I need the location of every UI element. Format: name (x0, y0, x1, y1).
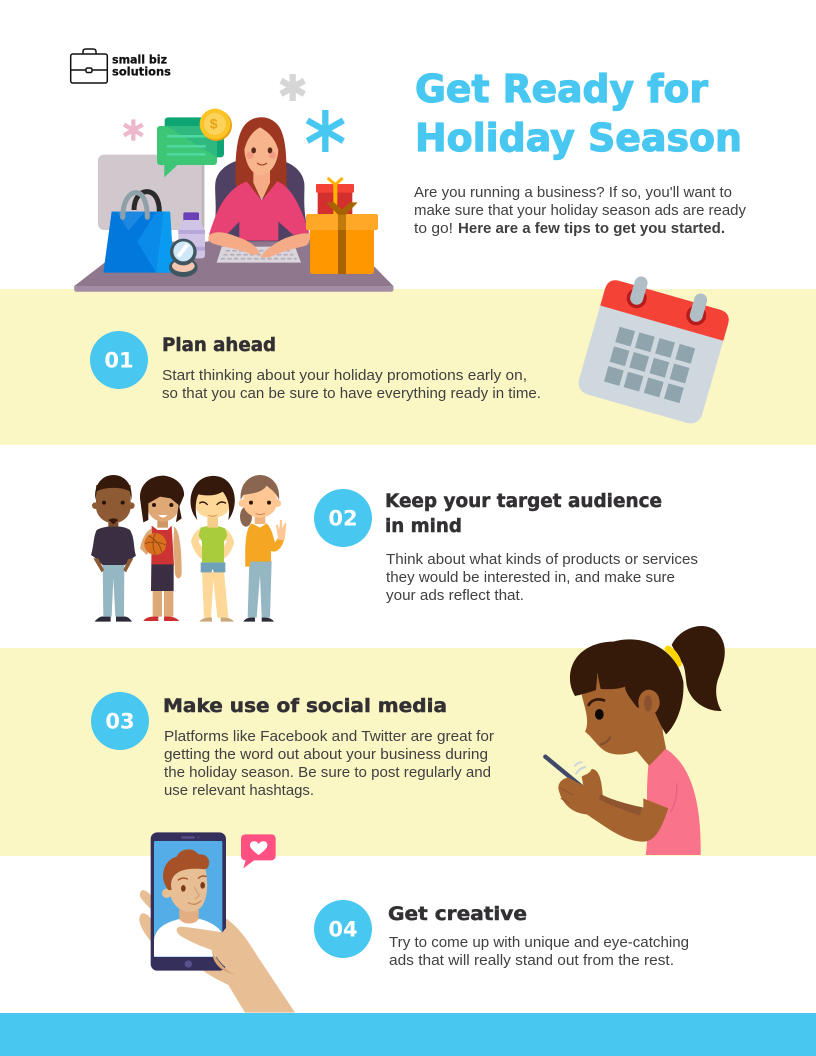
phone (545, 757, 582, 787)
ear (638, 690, 660, 715)
sleeve fold (671, 783, 677, 812)
logo wordmark: small biz (112, 52, 167, 66)
orange gift (306, 202, 378, 274)
man in selfie (154, 849, 222, 957)
body 02: your ads reflect that. (386, 588, 524, 604)
perfume bottle (178, 212, 205, 258)
icon: gold coin (200, 109, 232, 141)
icon: gold coin: $ (210, 116, 218, 132)
monitor (98, 155, 204, 230)
arms and hands (208, 232, 310, 257)
body 04 (389, 935, 689, 969)
thumb (177, 925, 245, 972)
intro text: make sure that your holiday season ads are ready (414, 203, 747, 219)
person 3 (190, 476, 235, 622)
number badge 03: 03 (105, 710, 135, 734)
tap marks (575, 762, 585, 774)
body 02 (386, 552, 698, 604)
icon: pink asterisk (124, 119, 143, 141)
band: yellow section 01 (0, 289, 816, 445)
number badge 01: 01 (104, 348, 134, 372)
heading 04: Get creative (388, 903, 527, 925)
keyboard (217, 247, 301, 263)
tip 01: plan ahead (90, 331, 541, 402)
bubble with heart (241, 834, 276, 868)
icon: grey asterisk (281, 74, 304, 101)
person 4 (239, 475, 286, 622)
illustration: four diverse people (91, 475, 286, 622)
title (415, 67, 742, 160)
number badge 03 (91, 692, 149, 750)
palm crease (212, 950, 236, 974)
tip 03: social media (91, 692, 494, 799)
body 03: use relevant hashtags. (164, 783, 314, 799)
number badge 02: 02 (328, 506, 358, 530)
person 1 (91, 475, 136, 622)
blue shopping bag (103, 192, 174, 273)
number badge 02 (314, 489, 372, 547)
number badge 04 (314, 900, 372, 958)
heading 02 (385, 490, 662, 537)
palm and wrist (200, 917, 295, 1013)
red gift (316, 178, 354, 216)
body 01: Start thinking about your holiday promotions early on, (162, 368, 527, 384)
phone body (151, 832, 226, 971)
heading 01: Plan ahead (162, 334, 276, 356)
hair (570, 639, 683, 734)
body 04: Try to come up with unique and eye-catching (389, 935, 689, 951)
woman (209, 117, 309, 241)
body 03: getting the word out about your business during (164, 747, 488, 763)
intro text (414, 185, 747, 237)
face features (589, 699, 610, 744)
head and neck (582, 675, 666, 766)
logo wordmark: solutions (112, 64, 171, 78)
chat bubbles (157, 117, 224, 177)
heading 02: in mind (385, 515, 462, 537)
phone screen (154, 836, 222, 968)
icon: calendar (576, 274, 732, 426)
heading 03: Make use of social media (163, 695, 447, 717)
heading 02: Keep your target audience (385, 490, 662, 512)
intro text: Are you running a business? If so, you'll want to (414, 185, 732, 201)
intro text: Here are a few tips to get you started. (458, 221, 725, 237)
number badge 01 (90, 331, 148, 389)
icon: blue asterisk (307, 110, 343, 152)
arm shadow (561, 788, 642, 815)
illustration: girl looking at phone (545, 626, 725, 855)
body 01 (162, 368, 541, 402)
tip 02: target audience (314, 489, 698, 604)
desk (74, 242, 393, 292)
illustration: hand holding phone with selfie (139, 832, 295, 1013)
scrunchie (668, 649, 678, 664)
body 04: ads that will really stand out from the rest. (389, 953, 674, 969)
logo wordmark (112, 52, 171, 78)
icon: briefcase (71, 49, 107, 83)
title: Holiday Season (415, 116, 742, 160)
arm and hand (558, 769, 668, 842)
body 02: they would be interested in, and make sure (386, 570, 675, 586)
body 03: the holiday season. Be sure to post regularly and (164, 765, 491, 781)
tip 04: get creative (314, 900, 689, 969)
body 03: Platforms like Facebook and Twitter are great for (164, 729, 494, 745)
footer band (0, 1013, 816, 1056)
ponytail (672, 626, 725, 711)
person 2 (140, 476, 184, 621)
body 02: Think about what kinds of products or services (386, 552, 698, 568)
band: yellow section 03 (0, 648, 816, 856)
body 03 (164, 729, 494, 799)
body 01: so that you can be sure to have everything ready in time. (162, 386, 541, 402)
logo: small biz solutions (71, 49, 171, 83)
fingers behind phone (139, 890, 155, 945)
makeup compact (169, 239, 198, 277)
body in pink shirt (646, 748, 701, 855)
office chair (208, 157, 311, 242)
intro text: to go! (414, 221, 453, 237)
title: Get Ready for (415, 67, 708, 111)
illustration: woman at desk with gifts (74, 74, 393, 292)
number badge 04: 04 (328, 918, 358, 942)
